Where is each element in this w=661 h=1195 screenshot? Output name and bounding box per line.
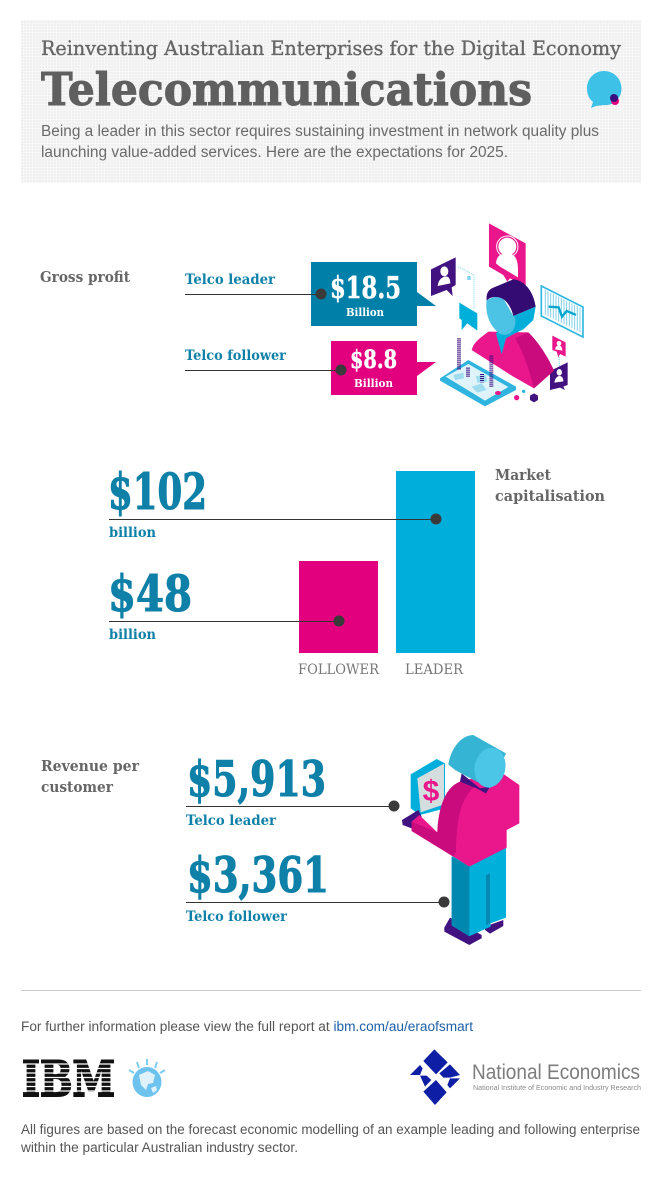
- callout: follower gross profit: [331, 341, 436, 395]
- label: telco leader: Telco leader: [186, 813, 277, 829]
- axis label: leader: LEADER: [405, 662, 463, 678]
- label: telco leader: Telco leader: [185, 272, 276, 288]
- value: $102 billion: $102: [108, 462, 207, 521]
- shoes: [444, 918, 503, 945]
- heading: gross profit: Gross profit: [40, 268, 130, 286]
- footer text: further information: For further information please view the full report at ibm.com/au/eraofsmart: [21, 1019, 473, 1034]
- dotted connector: [458, 267, 474, 308]
- body: [472, 332, 554, 388]
- follower pointer: [185, 364, 346, 376]
- value: $48 billion: $48: [108, 564, 192, 623]
- bar: follower: [299, 561, 378, 653]
- unit: billion: billion: [109, 525, 156, 541]
- intro text: launching value-added services. Here are the expectations for 2025.: [41, 144, 508, 161]
- axis label: follower: FOLLOWER: [298, 662, 379, 678]
- illustration: person holding tablet: [402, 735, 519, 945]
- intro text: Being a leader in this sector requires sustaining investment in network quality plus: [41, 123, 599, 140]
- legs: [452, 847, 506, 936]
- torso: [412, 772, 519, 867]
- icon: smarter planet: [129, 1059, 165, 1097]
- panel: header: [21, 20, 641, 183]
- heading: market capitalisation: capitalisation: [495, 487, 605, 505]
- leader pointer: [185, 288, 326, 300]
- icon: speech bubble: [587, 71, 622, 108]
- tablet: [440, 360, 516, 406]
- head: [448, 735, 509, 793]
- head: [486, 279, 536, 354]
- neck and collar: [496, 307, 536, 354]
- panel: market capitalisation: [108, 462, 605, 678]
- leader pointer: [186, 800, 400, 812]
- callout: leader gross profit: Billion: [346, 305, 385, 319]
- subtitle: Reinventing Australian Enterprises for the Digital Economy: [41, 36, 622, 60]
- logo: National Economics: National Institute of Economic and Industry Research: [473, 1085, 641, 1092]
- label: telco follower: Telco follower: [186, 909, 288, 925]
- hand: [402, 810, 422, 828]
- unit: billion: billion: [109, 627, 156, 643]
- icon: diamond mark: [410, 1049, 460, 1105]
- value: $3,361: $3,361: [187, 846, 329, 904]
- striped data bars: [459, 338, 491, 387]
- illustration: person with devices: [431, 223, 583, 406]
- callout: leader gross profit: $18.5: [330, 271, 401, 306]
- callout: leader gross profit: [311, 262, 436, 326]
- heading: revenue per customer: Revenue per: [41, 757, 140, 775]
- tablet: [411, 759, 445, 815]
- pink profile card: [489, 223, 526, 287]
- face: [486, 297, 515, 335]
- blue speech bubble: [459, 303, 477, 331]
- small pink card: [552, 336, 566, 357]
- heading: market capitalisation: Market: [495, 466, 551, 484]
- chart panel: [541, 286, 583, 337]
- purple profile card: [431, 257, 456, 296]
- small purple card: [550, 362, 568, 390]
- callout: follower gross profit: Billion: [354, 376, 394, 390]
- title: Telecommunications: [41, 63, 532, 116]
- value: $5,913: $5,913: [187, 750, 326, 808]
- panel: revenue per customer: [41, 750, 450, 925]
- footnote: within the particular Australian industry sector.: [20, 1140, 298, 1155]
- footnote: All figures are based on the forecast economic modelling of an example leading and following enterprise: [21, 1122, 640, 1137]
- label: telco follower: Telco follower: [185, 348, 287, 364]
- hair: [487, 279, 536, 316]
- leader pointer: [109, 514, 442, 524]
- divider: [21, 990, 641, 992]
- logo: National Economics: [410, 1049, 641, 1105]
- follower pointer: [186, 896, 450, 908]
- panel: gross profit: [40, 262, 436, 395]
- decorative dots: [514, 390, 538, 402]
- bar: leader: [396, 471, 475, 653]
- tablet: $: [423, 775, 440, 808]
- follower pointer: [109, 616, 344, 626]
- callout: follower gross profit: $8.8: [350, 345, 397, 374]
- logo: IBM: IBM: [22, 1050, 115, 1108]
- logo: National Economics: National Economics: [472, 1061, 640, 1084]
- heading: revenue per customer: customer: [41, 778, 114, 796]
